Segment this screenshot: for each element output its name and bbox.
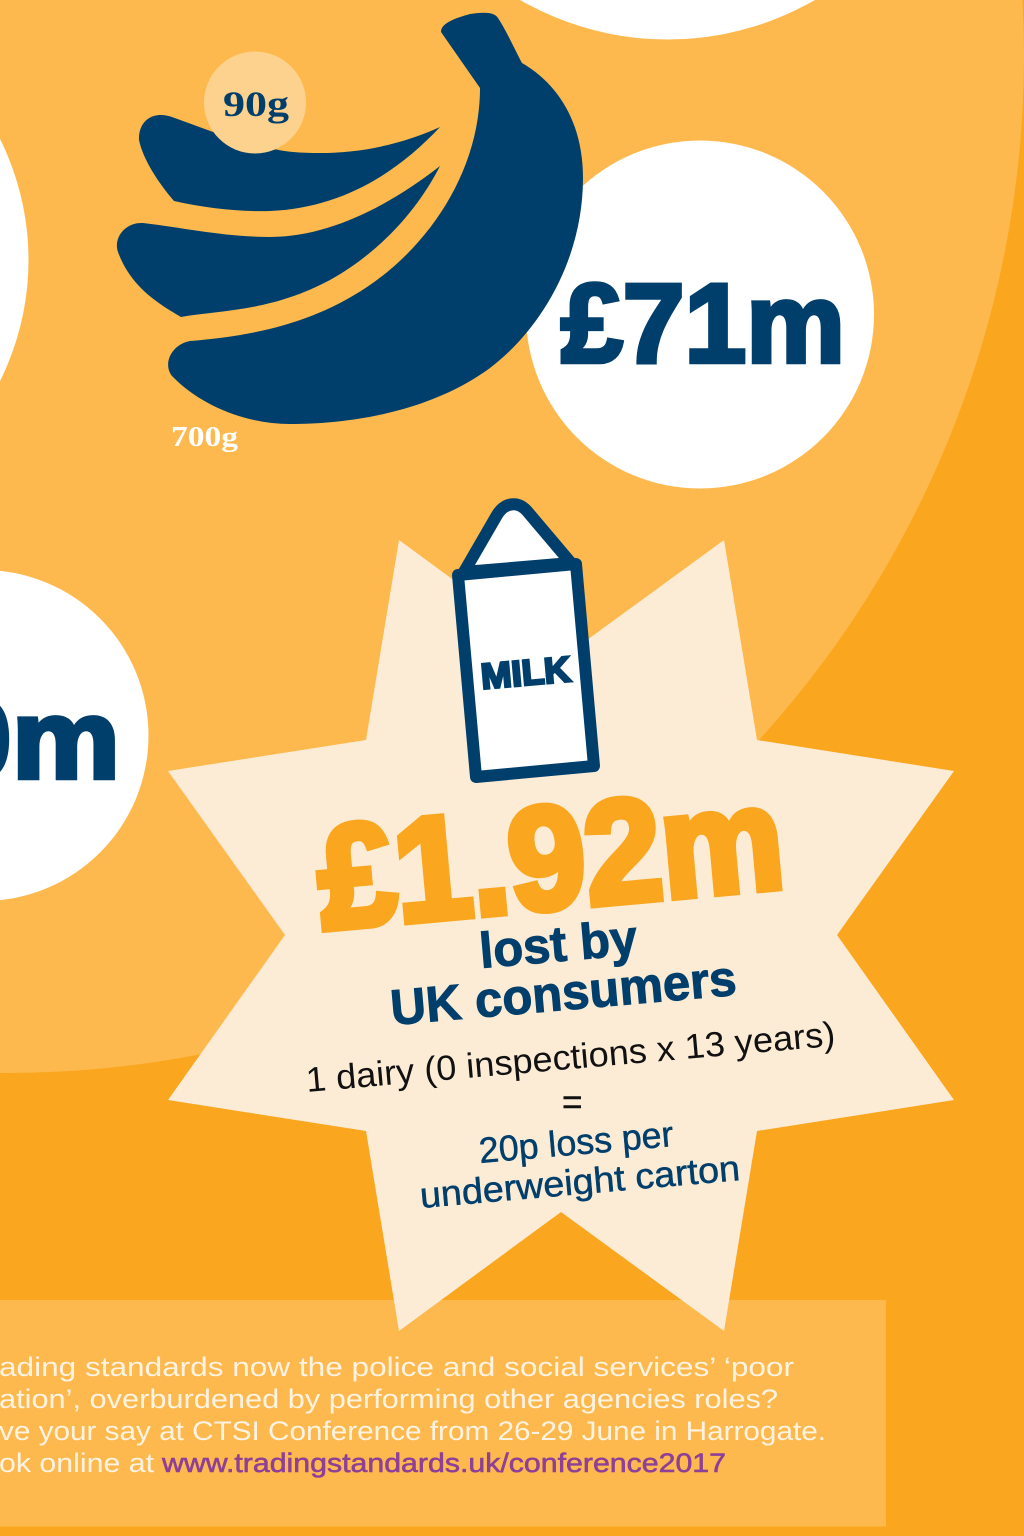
weight label circle: 90g: 90g [223,84,289,124]
footer text: ading standards now the police and social services’ ‘poor [0,1352,794,1382]
left white circle [0,0,28,532]
white circle: cropped amount [0,570,148,901]
subheading: UK consumers [388,950,739,1036]
icon: milk carton: MILK [479,648,572,697]
weight label: 700g: 700g [171,422,238,453]
footer text: ation’, overburdened by performing other agencies roles? [0,1384,778,1414]
underweight carton note [418,1113,741,1216]
white circle: £71m: £71m [561,261,845,386]
equation text: = [562,1083,582,1122]
starburst panel [168,540,954,1331]
underweight carton note: 20p loss per [477,1113,675,1171]
subheading [388,909,739,1036]
white circle: £71m [526,140,874,488]
weight label circle: 90g [204,52,306,154]
footer text: ok online at [0,1448,155,1478]
top white circle [372,0,962,40]
underweight carton note: underweight carton [418,1147,741,1216]
icon: milk carton [458,504,594,777]
icon: banana bunch [117,13,583,424]
large light orange circle [0,0,1024,1073]
footer text [0,1352,826,1478]
footer text: www.tradingstandards.uk/conference2017 [161,1448,726,1478]
footer panel [0,1300,886,1526]
footer text: ve your say at CTSI Conference from 26-29 June in Harrogate. [0,1416,826,1446]
headline amount: £1.92m [311,755,790,960]
subheading: lost by [477,909,640,979]
equation text: 1 dairy (0 inspections x 13 years) [304,1015,837,1100]
